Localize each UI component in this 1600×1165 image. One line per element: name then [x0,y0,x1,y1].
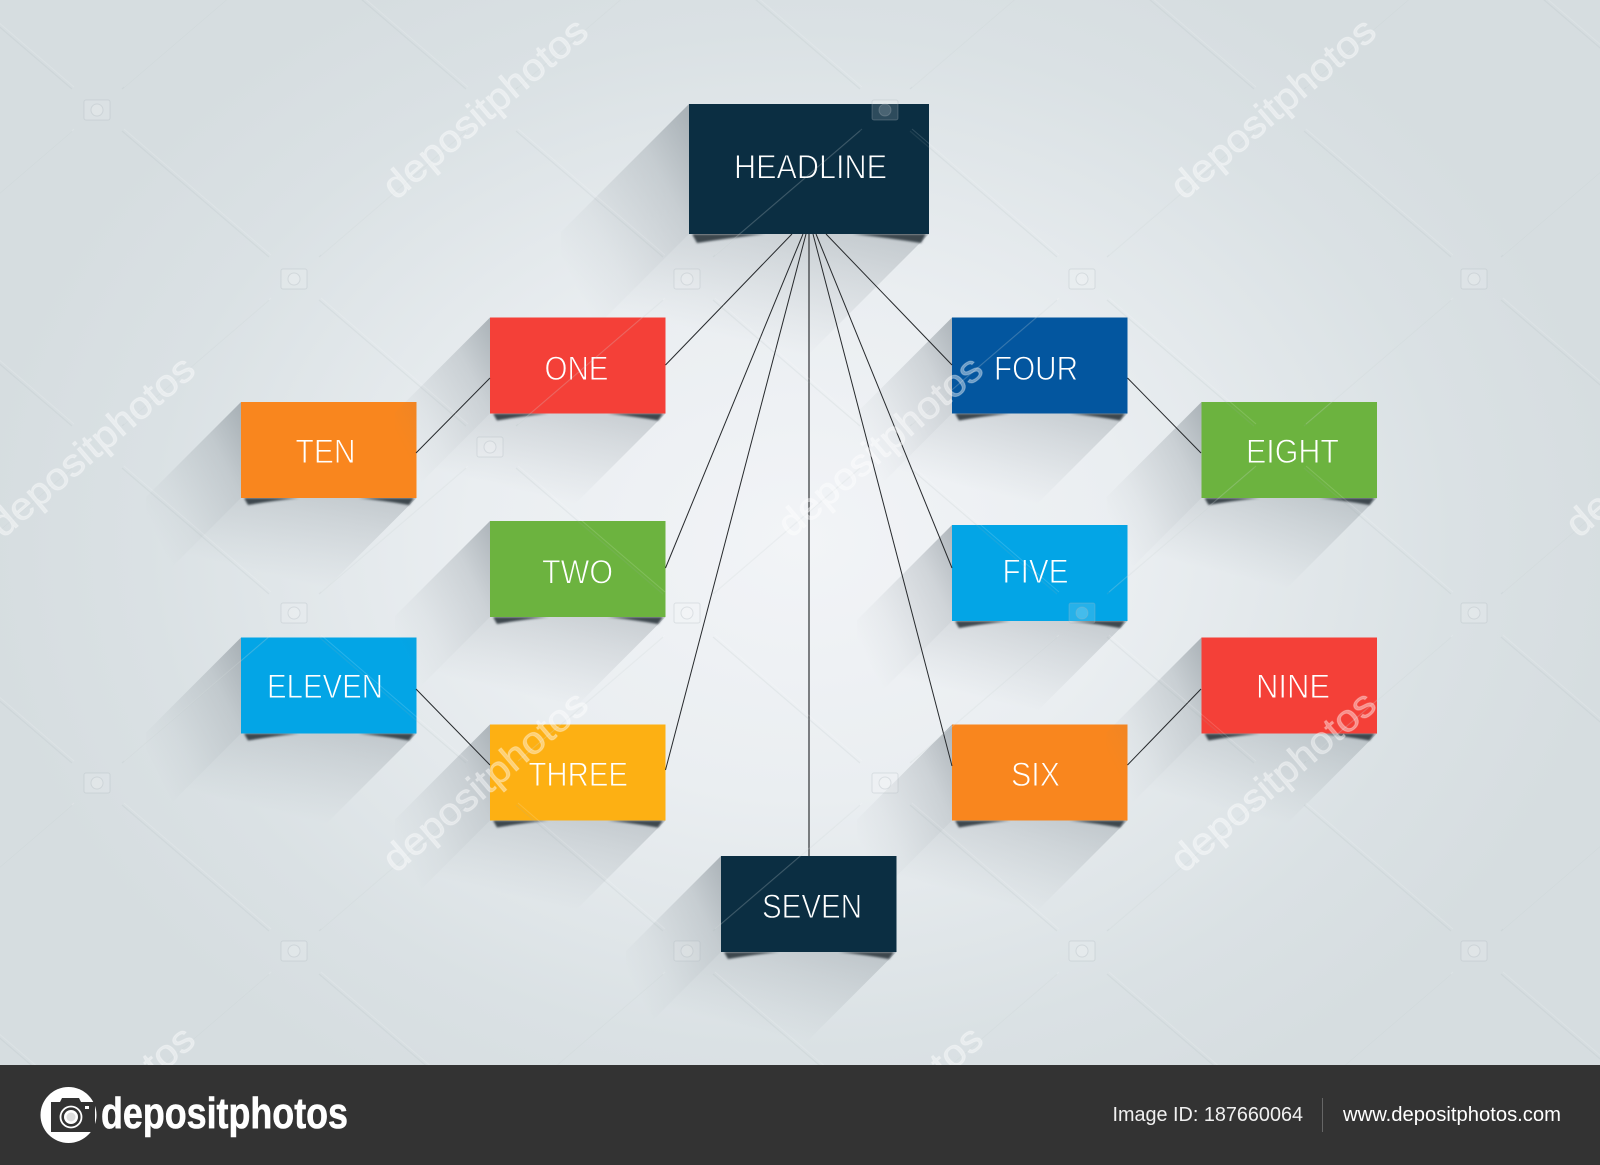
node: nine [1106,638,1377,828]
website: www.depositphotos.com [1342,1104,1561,1126]
box: seven [721,856,896,952]
watermark texts: depositphotos [1163,683,1385,881]
box: two [490,521,666,617]
node: one [395,318,666,508]
box: six [952,724,1128,820]
box: nine [1202,638,1377,734]
label: seven: SEVEN [762,888,862,926]
node: seven [626,856,896,1047]
long shadow: two [395,521,666,712]
long shadow: four [857,318,1128,508]
node: eleven [146,638,416,828]
box: eight [1202,402,1377,498]
long shadow: five [857,525,1128,716]
long shadow: eight [1106,402,1377,593]
watermark texts: depositphotos [375,10,597,208]
node: three [395,724,666,916]
node: two [395,521,666,712]
label: five: FIVE [1002,553,1068,591]
image id: Image ID: 187660064 [1112,1104,1303,1126]
watermark camera icons [84,100,1487,961]
node: headline [561,104,929,362]
node: four [857,318,1128,508]
box: five [952,525,1128,621]
watermark texts: depositphotos [770,348,992,546]
label: one: ONE [544,350,608,388]
long shadow: six [857,724,1128,916]
box: eleven [241,638,416,734]
label: nine: NINE [1256,668,1330,706]
label: six: SIX [1011,756,1060,794]
long shadow: headline [561,104,929,362]
label: ten: TEN [296,433,356,471]
long shadow: nine [1106,638,1377,828]
connector lines [416,234,1201,856]
long shadow: eleven [146,638,416,828]
node: ten [146,402,416,593]
watermark texts: depositphotos [1163,10,1385,208]
footer bar [0,1065,1600,1165]
label: eight: EIGHT [1246,433,1339,471]
watermark texts: depositphotos [375,683,597,881]
box: headline [689,104,929,234]
long shadow: ten [146,402,416,593]
box: one [490,318,666,414]
icon: camera logo [40,1087,96,1143]
label: three: THREE [528,756,628,794]
label: eleven: ELEVEN [267,668,383,706]
label: two: TWO [542,554,613,592]
long shadow: one [395,318,666,508]
brand name: depositphotos [101,1089,348,1138]
box: three [490,724,666,820]
label: four: FOUR [994,350,1078,388]
label: headline: HEADLINE [734,148,887,186]
node: five [857,525,1128,716]
box: ten [241,402,416,498]
node: six [857,724,1128,916]
long shadow: seven [626,856,896,1047]
node: eight [1106,402,1377,593]
box: four [952,318,1128,414]
long shadow: three [395,724,666,916]
